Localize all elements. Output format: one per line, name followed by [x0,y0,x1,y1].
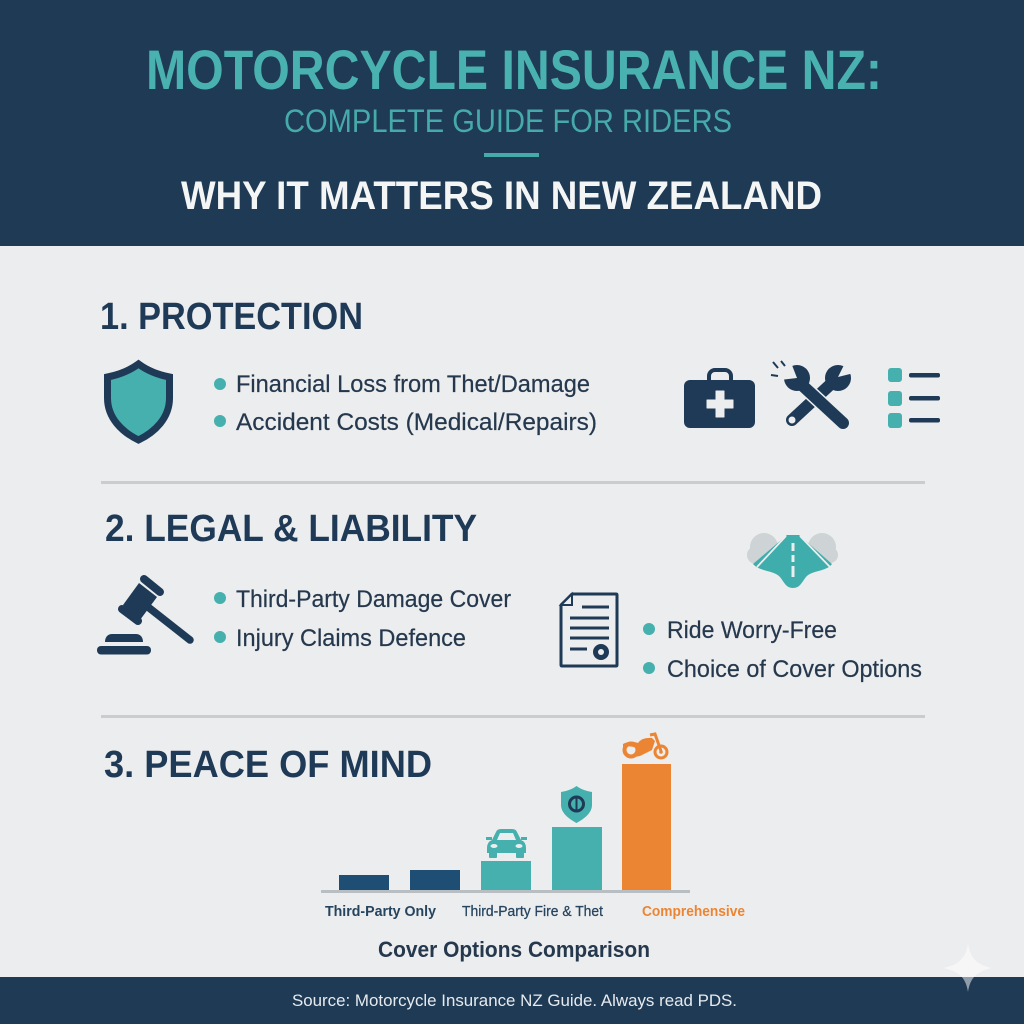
icon: sparkle watermark [943,943,992,992]
icon: shield [108,364,170,440]
icon: small shield [561,786,592,823]
label: third-party fire and theft: Third-Party Fire & Thet [462,904,603,920]
bullet list: peace of mind: Ride Worry-Free [667,617,837,644]
title: MOTORCYCLE INSURANCE NZ: [146,38,882,101]
icon: policy document [561,594,617,666]
bullet list: protection: Financial Loss from Thet/Damage [236,371,590,398]
bar: fire and theft low [481,861,531,890]
icon: motorcycle [623,734,667,758]
bar: third-party high [410,870,460,890]
bullet list: protection [214,371,597,436]
icon: checklist [888,368,940,428]
bar chart: cover options [321,734,745,962]
chart caption: Cover Options Comparison [378,937,650,962]
label: third-party only: Third-Party Only [325,904,436,920]
heading: peace of mind: 3. PEACE OF MIND [104,744,432,786]
header banner [0,0,1024,246]
bullet list: legal: Injury Claims Defence [236,625,466,652]
bullet list: peace of mind [643,617,922,683]
panel: peace of mind [104,734,745,962]
panel: protection [100,296,940,440]
panel: legal and liability [97,508,922,683]
footer bar [0,977,1024,1024]
bar: third-party low [339,875,389,890]
heading: legal and liability: 2. LEGAL & LIABILITY [105,508,477,550]
icon: road with clouds [747,533,838,588]
icon: first aid kit [684,370,755,428]
bullet list: protection: Accident Costs (Medical/Repairs) [236,409,597,436]
bullet list: legal [214,586,511,652]
icon: crossed wrenches [771,360,858,424]
bar: comprehensive [622,764,671,890]
heading: protection: 1. PROTECTION [100,296,363,338]
label: comprehensive: Comprehensive [642,904,745,920]
source note: Source: Motorcycle Insurance NZ Guide. Always read PDS. [292,991,737,1010]
accent rule [484,153,539,157]
bar: fire and theft high [552,827,602,890]
banner heading: WHY IT MATTERS IN NEW ZEALAND [181,174,822,218]
icon: gavel [97,579,190,654]
subtitle: COMPLETE GUIDE FOR RIDERS [284,103,732,139]
icon: car [486,829,527,858]
bullet list: peace of mind: Choice of Cover Options [667,656,922,683]
bullet list: legal: Third-Party Damage Cover [236,586,511,613]
